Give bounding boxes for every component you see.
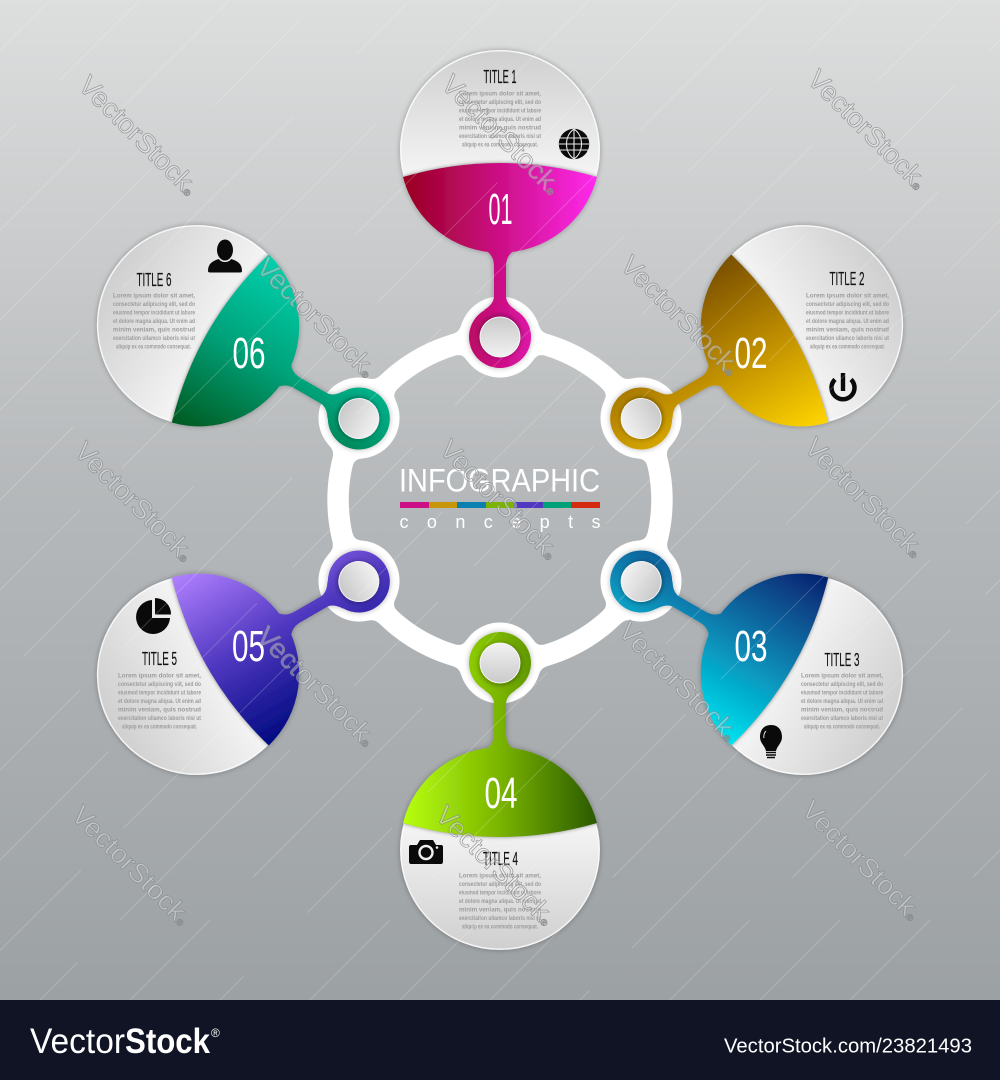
panel: step 04 <box>401 632 599 949</box>
body text 5: Lorem ipsum dolor sit amet, <box>118 672 201 680</box>
number 05: 05 <box>232 622 265 671</box>
body text 4: et dolore magna aliqua. Ut enim ad <box>459 898 541 905</box>
panel: step 01 <box>401 51 599 368</box>
body text 6: eiusmod tempor incididunt ut labore <box>113 310 195 316</box>
colored bar <box>400 502 600 508</box>
body text 5: minim veniam, quis nostrud <box>118 706 201 714</box>
body text 1 <box>459 90 542 148</box>
icon: globe <box>559 129 589 159</box>
number 06: 06 <box>232 329 266 378</box>
body text 5 <box>118 672 202 730</box>
body text 4: Lorem ipsum dolor sit amet, <box>459 872 541 880</box>
body text 2 <box>806 292 890 350</box>
body text 6: consectetur adipiscing elit, sed do <box>113 301 195 308</box>
icon: camera <box>409 840 443 864</box>
body text 3: eiusmod tempor incididunt ut labore <box>801 690 883 696</box>
icon: light bulb <box>760 725 782 758</box>
watermarks: VectorStock® <box>799 432 930 564</box>
body text 3: et dolore magna aliqua. Ut enim ad <box>801 698 883 705</box>
panel: step 01: 01 <box>488 185 512 234</box>
body text 4: exercitation ullamco laboris nisi ut <box>459 915 542 922</box>
circle and colored segment 03 <box>607 548 906 778</box>
body text 6 <box>113 292 196 350</box>
icon: user <box>208 240 242 272</box>
circle and colored segment 02 <box>607 222 906 452</box>
footer image id: VectorStock.com/23821493 <box>724 1036 972 1058</box>
body text 2: exercitation ullamco laboris nisi ut <box>806 335 890 342</box>
number 03: 03 <box>734 622 768 671</box>
watermarks: VectorStock® <box>434 434 565 566</box>
footer logo <box>30 1022 220 1061</box>
body text 3: consectetur adipiscing elit, sed do <box>801 681 883 688</box>
footer logo: Stock <box>125 1022 210 1061</box>
panel: step 02 <box>607 222 906 452</box>
title 3: TITLE 3 <box>824 650 860 670</box>
title 6: TITLE 6 <box>136 270 172 290</box>
body text 5: eiusmod tempor incididunt ut labore <box>118 690 201 696</box>
title 5: TITLE 5 <box>142 649 177 669</box>
body text 4: aliquip ex ea commodo consequat. <box>462 924 538 930</box>
body text 6: Lorem ipsum dolor sit amet, <box>113 292 195 300</box>
icon: pie chart <box>136 598 171 634</box>
circle and colored segment 01 <box>401 51 599 368</box>
body text 5: aliquip ex ea commodo consequat. <box>122 724 197 730</box>
panel: step 06 <box>94 222 393 452</box>
watermarks: VectorStock® <box>430 800 561 932</box>
number 04: 04 <box>484 769 518 818</box>
body text 1: exercitation ullamco laboris nisi ut <box>459 133 542 140</box>
watermarks: VectorStock® <box>436 69 567 201</box>
watermarks <box>66 64 933 932</box>
body text 6: aliquip ex ea commodo consequat. <box>116 344 191 350</box>
title 2: TITLE 2 <box>830 269 864 289</box>
body text 1: Lorem ipsum dolor sit amet, <box>459 90 541 98</box>
watermarks: VectorStock® <box>802 64 933 196</box>
panel: step 03 <box>607 548 906 778</box>
circle and colored segment 06 <box>94 222 393 452</box>
footer logo: Vector <box>30 1022 125 1061</box>
body text 2: et dolore magna aliqua. Ut enim ad <box>806 318 889 325</box>
body text 2: aliquip ex ea commodo consequat. <box>810 344 885 350</box>
watermarks: VectorStock® <box>251 621 382 753</box>
body text 4: eiusmod tempor incididunt ut labore <box>459 890 541 896</box>
body text 4 <box>459 872 542 930</box>
body text 3: exercitation ullamco laboris nisi ut <box>801 715 884 722</box>
body text 2: Lorem ipsum dolor sit amet, <box>806 292 889 300</box>
center heading <box>399 462 600 532</box>
body text 1: eiusmod tempor incididunt ut labore <box>459 108 541 114</box>
icon: power <box>832 373 855 399</box>
watermarks: VectorStock® <box>73 70 204 202</box>
body text 2: consectetur adipiscing elit, sed do <box>806 301 889 308</box>
title: infographic: INFOGRAPHIC <box>399 462 600 498</box>
central hexagonal white ring <box>318 296 682 704</box>
watermarks: VectorStock® <box>69 436 200 568</box>
footer logo: ® <box>211 1026 220 1040</box>
body text 3: Lorem ipsum dolor sit amet, <box>801 672 883 680</box>
body text 1: consectetur adipiscing elit, sed do <box>459 99 541 106</box>
body text 2: minim veniam, quis nostrud <box>806 326 889 334</box>
body text 4: minim veniam, quis nostrud <box>459 906 541 914</box>
circle and colored segment 04 <box>401 632 599 949</box>
panel: step 05 <box>94 548 393 778</box>
watermarks: VectorStock® <box>796 795 927 927</box>
footer bar <box>0 1000 1000 1080</box>
body text 4: consectetur adipiscing elit, sed do <box>459 881 541 888</box>
watermarks: VectorStock® <box>615 250 746 382</box>
body text 1: aliquip ex ea commodo consequat. <box>462 142 538 148</box>
body text 1: minim veniam, quis nostrud <box>459 124 541 132</box>
body text 5: et dolore magna aliqua. Ut enim ad <box>118 698 201 705</box>
body text 5: exercitation ullamco laboris nisi ut <box>118 715 202 722</box>
body text 5: consectetur adipiscing elit, sed do <box>118 681 201 688</box>
title 4: TITLE 4 <box>483 849 518 869</box>
circle and colored segment 05 <box>94 548 393 778</box>
body text 6: et dolore magna aliqua. Ut enim ad <box>113 318 195 325</box>
body text 6: exercitation ullamco laboris nisi ut <box>113 335 196 342</box>
watermarks: VectorStock® <box>613 616 744 748</box>
watermarks: VectorStock® <box>251 252 382 384</box>
body text 2: eiusmod tempor incididunt ut labore <box>806 310 889 316</box>
body text 6: minim veniam, quis nostrud <box>113 326 195 334</box>
body text 3: minim veniam, quis nostrud <box>801 706 883 714</box>
title 1: TITLE 1 <box>484 67 516 87</box>
number 02: 02 <box>734 329 768 378</box>
watermarks: VectorStock® <box>66 800 197 932</box>
subtitle: concepts: concepts <box>400 512 600 532</box>
body text 3: aliquip ex ea commodo consequat. <box>804 724 880 730</box>
body text 1: et dolore magna aliqua. Ut enim ad <box>459 116 541 123</box>
body text 3 <box>801 672 884 730</box>
